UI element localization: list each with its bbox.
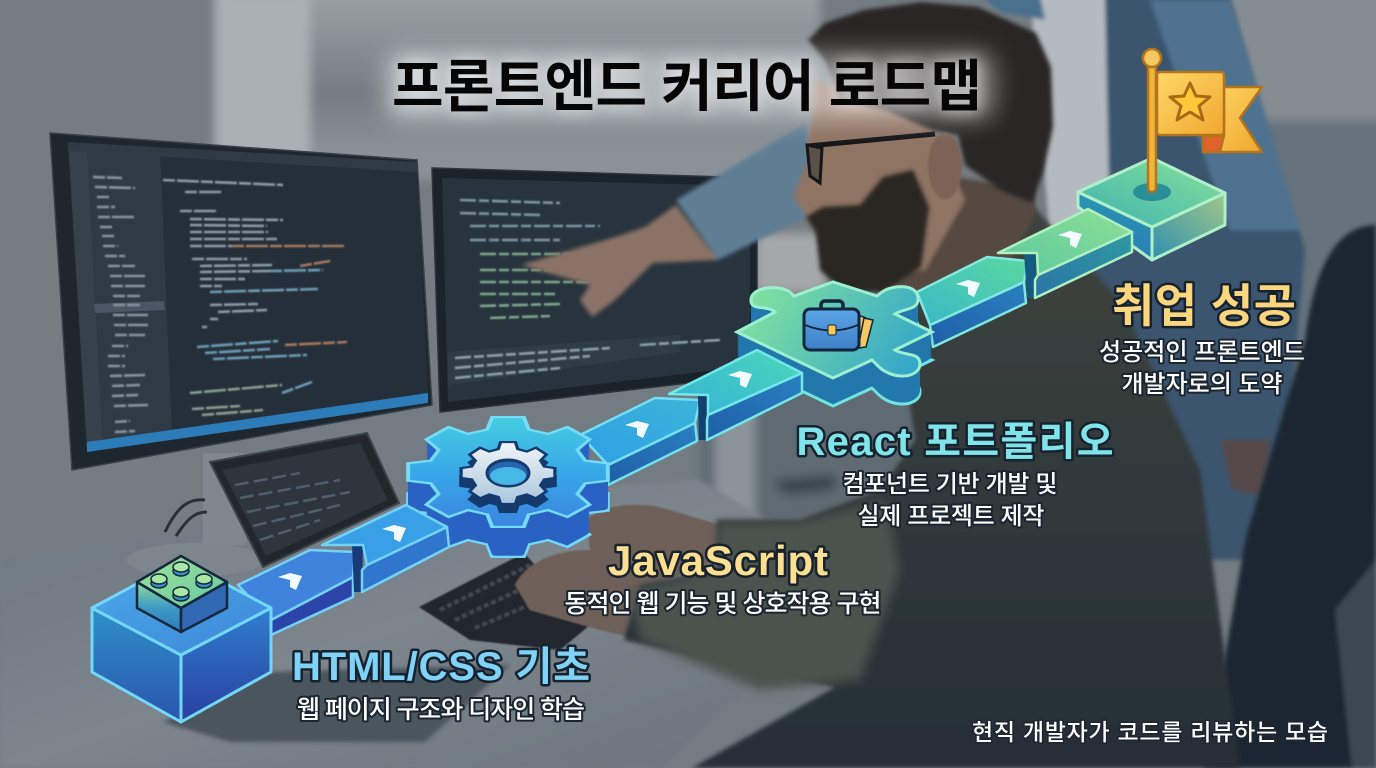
- title glow: [385, 52, 995, 120]
- node 3: puzzle piece with briefcase: [737, 282, 932, 406]
- colleague pointing at the screen: [521, 0, 1305, 560]
- man reviewing code: [624, 2, 1240, 768]
- node 1: cube with lego block: [92, 556, 271, 722]
- beard: [806, 170, 929, 292]
- tablet on desk: [165, 433, 399, 567]
- direction chevrons: [278, 231, 1082, 590]
- photo caption: 현직 개발자가 코드를 리뷰하는 모습: [972, 719, 1328, 745]
- arrow segment 3: [580, 398, 700, 485]
- step 4 label: [1099, 280, 1305, 398]
- step 1 label: [292, 645, 590, 724]
- step 3 label: React 포트폴리오: [796, 420, 1114, 464]
- step 2 label: JavaScript: [608, 537, 828, 584]
- step 3 label: 실제 프로젝트 제작: [858, 503, 1044, 530]
- node 2: gear: [408, 417, 608, 557]
- step 1 label: 웹 페이지 구조와 디자인 학습: [297, 696, 585, 724]
- step 2 label: 동적인 웹 기능 및 상호작용 구현: [564, 590, 882, 618]
- icon: lego brick: [137, 556, 227, 632]
- arrow segment 5: [917, 257, 1028, 347]
- arrow segment 6: [998, 209, 1132, 298]
- hair: [808, 2, 1053, 203]
- icon: briefcase: [804, 301, 873, 350]
- desk surface: [0, 480, 800, 768]
- step 3 label: 컴포넌트 기반 개발 및: [842, 471, 1058, 498]
- office chair: [1205, 225, 1376, 768]
- arrow segment 1: [238, 550, 355, 635]
- keyboard and hand: [419, 505, 720, 650]
- step 3 label: [796, 420, 1114, 530]
- step 4 label: 성공적인 프론트엔드: [1099, 339, 1305, 366]
- neck: [880, 170, 1035, 300]
- step 4 label: 취업 성공: [1112, 280, 1296, 332]
- roadmap path: [238, 49, 1262, 635]
- arrow segment 2: [322, 505, 449, 592]
- sleeve: [630, 500, 900, 690]
- ear: [928, 133, 962, 199]
- step 2 label: [564, 537, 882, 618]
- shirt: [624, 205, 1240, 768]
- glasses: [808, 134, 935, 146]
- step 1 label: HTML/CSS 기초: [292, 645, 590, 689]
- arrow segment 4: [669, 350, 802, 440]
- title: 프론트엔드 커리어 로드맵: [392, 55, 982, 118]
- step 4 label: 개발자로의 도약: [1122, 371, 1282, 398]
- node 4: platform with goal flag: [1078, 49, 1262, 260]
- right monitor with code: [432, 168, 757, 412]
- icon: gold flag: [1143, 49, 1262, 192]
- face: [793, 80, 965, 270]
- left monitor with code editor: [50, 133, 432, 577]
